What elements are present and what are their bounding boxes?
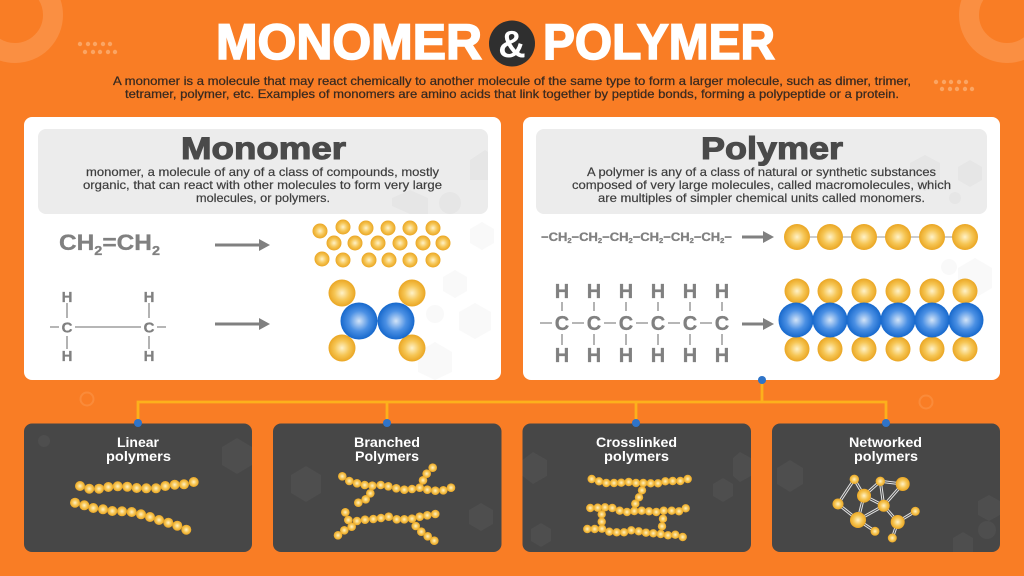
label: Crosslinked polymers: polymers	[604, 449, 669, 464]
linear chains	[70, 477, 199, 535]
label: Branched Polymers: Branched	[354, 435, 420, 450]
polymer description: composed of very large molecules, called macromolecules, which	[572, 178, 951, 192]
monomer header box	[38, 129, 488, 214]
icon: ampersand badge	[489, 20, 535, 66]
title: POLYMER	[543, 14, 775, 70]
formula: polyethylene chain: −CH	[663, 230, 690, 244]
label: Branched Polymers: Polymers	[355, 449, 419, 464]
formula: CH2=CH2: CH	[59, 230, 91, 255]
crosslinked chains	[583, 475, 692, 541]
polyethylene structural formula: H	[683, 281, 697, 303]
ethylene structural formula: H	[144, 348, 154, 365]
label: Crosslinked polymers	[596, 435, 677, 464]
arrow: chain to beads	[742, 231, 774, 243]
label: Linear polymers: polymers	[106, 449, 171, 464]
label: Crosslinked polymers: Crosslinked	[596, 435, 677, 450]
polymer header box	[536, 129, 987, 214]
monomer description	[83, 165, 442, 205]
monomer description: molecules, or polymers.	[196, 191, 330, 205]
polymer description: A polymer is any of a class of natural or synthetic substances	[587, 165, 936, 179]
polyethylene structural formula: H	[555, 281, 569, 303]
polyethylene structural formula: H	[587, 345, 601, 367]
polyethylene structural formula: H	[715, 281, 729, 303]
heading: Polymer: Polymer	[701, 130, 843, 166]
polyethylene structural formula: H	[683, 345, 697, 367]
title: MONOMER	[216, 14, 482, 70]
intro text: tetramer, polymer, etc. Examples of monomers are amino acids that link together by peptide bonds, forming a polypeptide or a protein.	[125, 87, 899, 101]
polyethylene structural formula: H	[715, 345, 729, 367]
label: Linear polymers	[106, 435, 171, 464]
icon: ampersand badge: &	[498, 24, 526, 66]
formula: polyethylene chain: 2	[628, 238, 633, 245]
network diagram	[832, 475, 920, 542]
polyethylene structural formula: H	[651, 281, 665, 303]
panel: monomer	[24, 117, 501, 380]
formula: polyethylene chain: −CH	[633, 230, 659, 244]
branched chains	[334, 463, 455, 545]
polyethylene structural formula: C	[619, 313, 633, 335]
polyethylene structural formula: H	[619, 281, 633, 303]
polyethylene structural formula: H	[587, 281, 601, 303]
label: Networked polymers: Networked	[849, 435, 922, 450]
connector tree	[134, 376, 890, 427]
arrow: structure to molecule	[215, 318, 270, 330]
label: Networked polymers	[849, 435, 922, 464]
ethylene molecule model	[328, 280, 426, 362]
ethylene structural formula: C	[144, 320, 155, 336]
polyethylene structural formula: C	[683, 313, 697, 335]
polyethylene structural formula: C	[715, 313, 729, 335]
polyethylene structural formula: H	[619, 345, 633, 367]
formula: polyethylene chain: 2	[567, 238, 572, 245]
formula: polyethylene chain: −CH	[694, 230, 720, 244]
monomer description: monomer, a molecule of any of a class of compounds, mostly	[86, 165, 439, 179]
polyethylene structural formula: H	[651, 345, 665, 367]
polyethylene structural formula: H	[555, 345, 569, 367]
card: crosslinked polymers	[522, 424, 751, 552]
ethylene structural formula: C	[62, 320, 73, 336]
formula: polyethylene chain: 2	[690, 238, 694, 245]
monomer description: organic, that can react with other molecules to form very large	[83, 178, 442, 192]
polymer bead chain	[784, 224, 978, 250]
arrow: formula to beads	[215, 239, 270, 251]
label: Networked polymers: polymers	[854, 449, 918, 464]
polyethylene structural formula	[540, 281, 729, 367]
card: linear polymers	[24, 424, 252, 552]
label: Linear polymers: Linear	[117, 435, 160, 450]
ethylene structural formula: H	[62, 289, 72, 306]
polymer molecule model	[778, 278, 984, 362]
intro text	[113, 74, 911, 101]
card: branched polymers	[273, 424, 502, 552]
polymer description	[572, 165, 951, 205]
formula: polyethylene chain: 2	[720, 238, 725, 245]
formula: polyethylene chain: −CH	[572, 230, 598, 244]
polyethylene structural formula: C	[555, 313, 569, 335]
card: networked polymers	[772, 424, 1000, 552]
ethylene structural formula: H	[62, 348, 72, 365]
monomer beads	[312, 220, 450, 268]
polyethylene structural formula: C	[651, 313, 665, 335]
formula: polyethylene chain: −	[724, 230, 732, 244]
formula: polyethylene chain: −CH	[541, 230, 565, 244]
panel: polymer	[523, 117, 1000, 380]
arrow: structure to model	[742, 318, 774, 330]
intro text: A monomer is a molecule that may react chemically to another molecule of the same type to form a larger molecule, such as dimer, trimer,	[113, 74, 911, 88]
formula: polyethylene chain: −CH	[602, 230, 628, 244]
ethylene structural formula: H	[144, 289, 154, 306]
formula: polyethylene chain: 2	[659, 238, 663, 245]
heading: Monomer: Monomer	[181, 130, 346, 166]
title	[216, 14, 775, 70]
formula: polyethylene chain: 2	[598, 238, 602, 245]
formula: CH2=CH2: =CH	[102, 230, 152, 255]
label: Branched Polymers	[354, 435, 420, 464]
ethylene structural formula	[50, 289, 166, 365]
formula: CH2=CH2: 2	[94, 243, 102, 258]
polyethylene structural formula: C	[587, 313, 601, 335]
polymer description: are multiples of simpler chemical units called monomers.	[598, 191, 925, 205]
formula: CH2=CH2: 2	[152, 243, 160, 258]
